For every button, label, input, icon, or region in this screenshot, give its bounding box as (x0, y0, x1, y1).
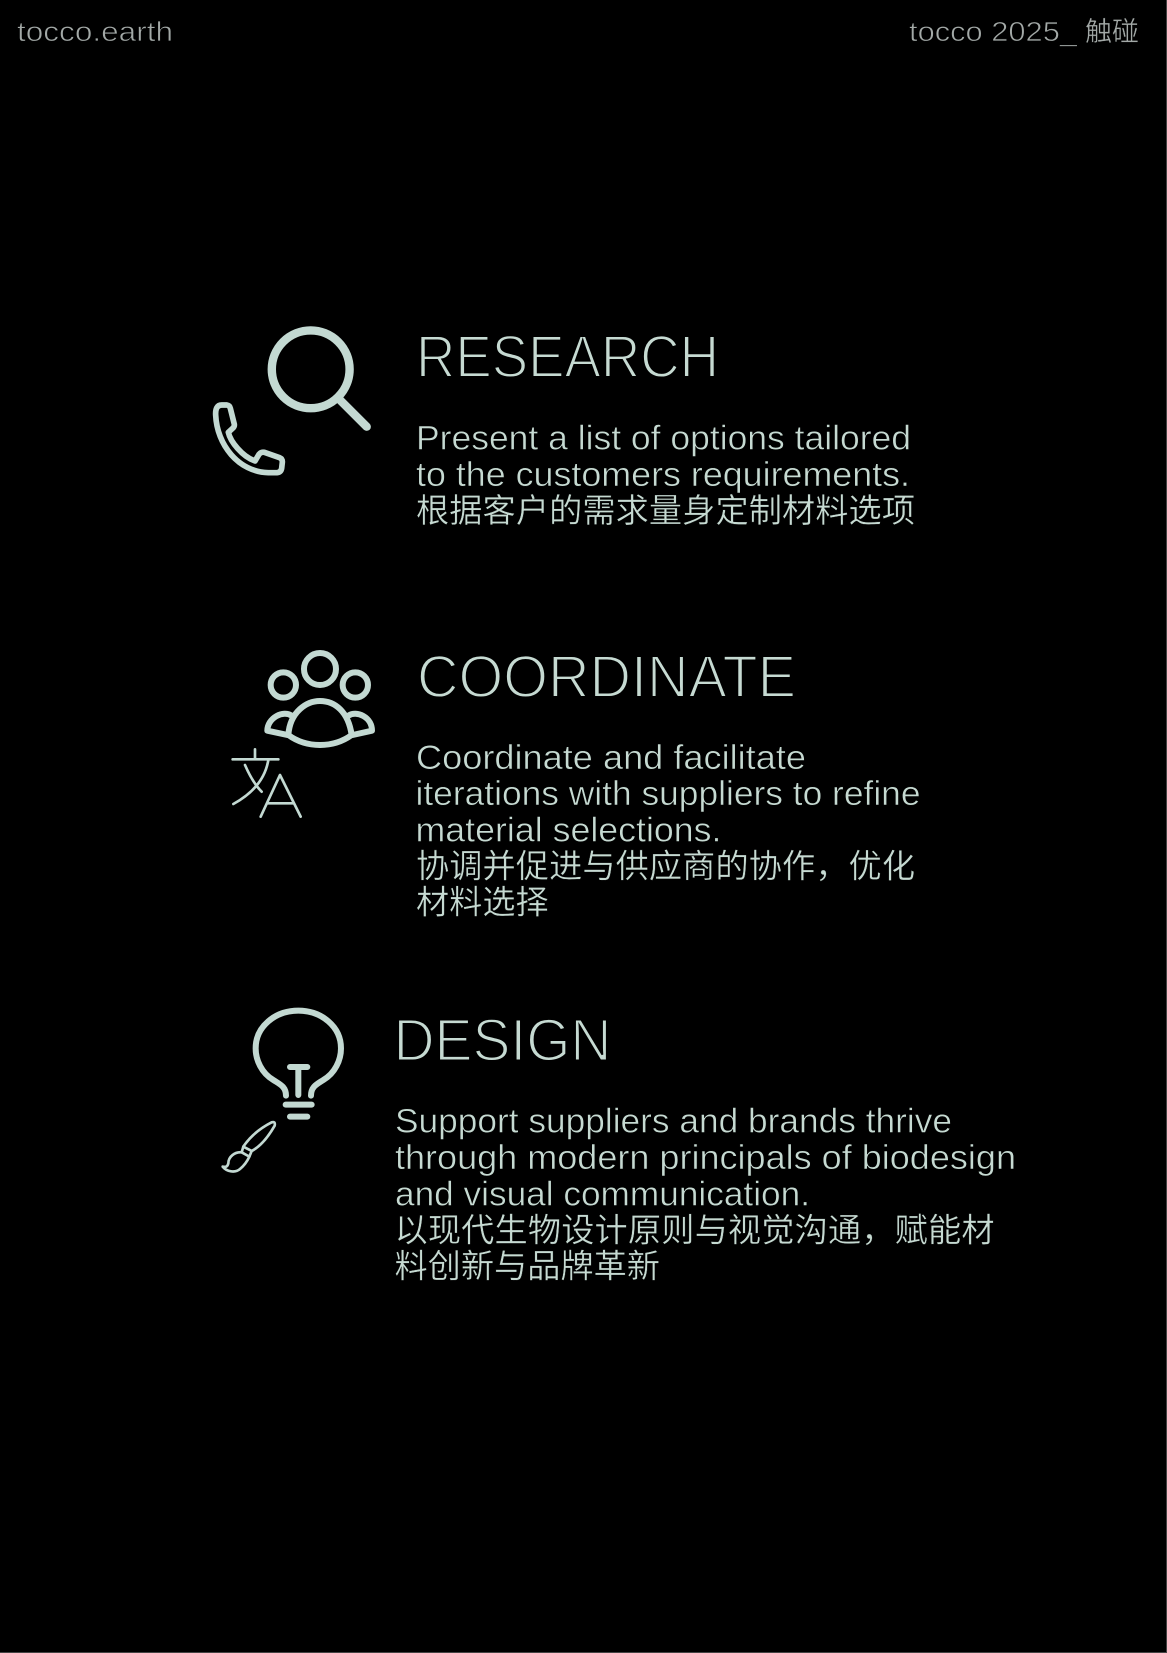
icon: translate (233, 749, 301, 817)
text: design description: 以现代生物设计原则与视觉沟通，赋能材 (394, 1212, 994, 1250)
panel: design (223, 1008, 1016, 1286)
icon: phone (216, 405, 282, 473)
header: edition label (909, 16, 1139, 47)
header: edition label: 触碰 (1085, 17, 1139, 47)
heading: design: DESIGN (394, 1008, 612, 1074)
text: design description: through modern principals of biodesign (395, 1139, 1016, 1177)
text: coordinate description: material selections. (416, 812, 722, 850)
text: coordinate description: iterations with suppliers to refine (416, 775, 920, 813)
text: design description: 料创新与品牌革新 (394, 1248, 660, 1286)
header: site name: tocco.earth (17, 16, 173, 47)
text: design description: and visual communication. (395, 1176, 810, 1214)
text: research description: to the customers requirements. (416, 456, 910, 494)
icon: magnifier (272, 330, 367, 427)
text: research description: 根据客户的需求量身定制材料选项 (416, 493, 915, 530)
text: design description (394, 1102, 1016, 1286)
text: coordinate description: Coordinate and facilitate (416, 739, 806, 777)
heading: research: RESEARCH (416, 324, 719, 390)
text: research description (416, 420, 915, 530)
panel: coordinate (233, 644, 920, 922)
header: edition label: tocco 2025_ (909, 16, 1077, 47)
icon: people group (267, 653, 372, 745)
text: coordinate description: 材料选择 (416, 884, 549, 922)
icon: light bulb (256, 1011, 341, 1117)
icon: paint brush (223, 1122, 275, 1171)
text: design description: Support suppliers and brands thrive (395, 1102, 952, 1140)
panel: research (216, 324, 915, 530)
heading: coordinate: COORDINATE (417, 644, 796, 710)
text: coordinate description: 协调并促进与供应商的协作，优化 (416, 848, 915, 886)
text: coordinate description (416, 739, 920, 922)
text: research description: Present a list of options tailored (416, 420, 911, 458)
